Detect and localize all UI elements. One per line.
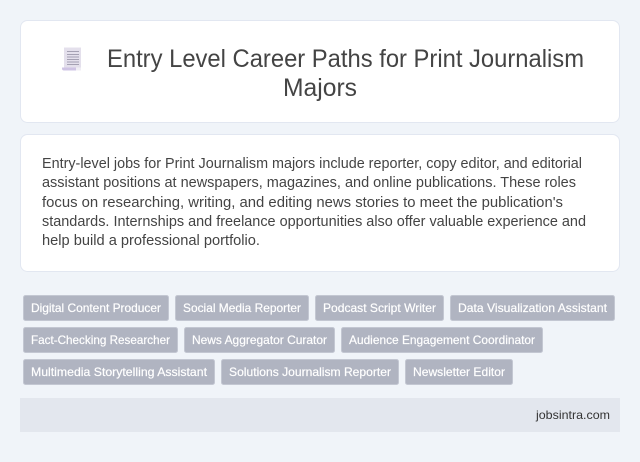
panel: title card bbox=[20, 20, 620, 122]
tag: Newsletter Editor: Newsletter Editor bbox=[413, 365, 505, 379]
tag: News Aggregator Curator bbox=[184, 328, 334, 352]
tag: News Aggregator Curator: News Aggregator Curator bbox=[192, 333, 327, 347]
panel: description bbox=[20, 134, 620, 272]
tag: Solutions Journalism Reporter bbox=[222, 360, 398, 384]
text block: description: focus on researching, writing, and editing news stories to meet the publication's bbox=[42, 195, 563, 211]
tag: Fact-Checking Researcher bbox=[24, 328, 178, 352]
tag: Social Media Reporter: Social Media Reporter bbox=[183, 301, 301, 315]
tag: Newsletter Editor bbox=[406, 360, 512, 384]
text block: description: Entry-level jobs for Print Journalism majors include reporter, copy editor, and editorial bbox=[42, 156, 582, 172]
title bbox=[107, 45, 584, 102]
tag: Audience Engagement Coordinator: Audience Engagement Coordinator bbox=[349, 333, 535, 347]
tag: Multimedia Storytelling Assistant bbox=[24, 360, 214, 384]
tag: Podcast Script Writer: Podcast Script Writer bbox=[323, 301, 436, 315]
footer source: jobsintra.com bbox=[535, 408, 610, 422]
text block: description bbox=[42, 156, 586, 249]
tag: Digital Content Producer bbox=[24, 296, 168, 320]
tag: Fact-Checking Researcher: Fact-Checking Researcher bbox=[31, 333, 170, 347]
text block: description: standards. Internships and freelance opportunities also offer valuable experience and bbox=[42, 214, 586, 230]
tags bbox=[24, 296, 614, 384]
icon: newspaper scroll bbox=[62, 48, 81, 70]
tag: Data Visualization Assistant: Data Visualization Assistant bbox=[458, 301, 608, 315]
footer bbox=[20, 398, 620, 432]
title: Majors bbox=[283, 74, 357, 102]
tag: Multimedia Storytelling Assistant: Multimedia Storytelling Assistant bbox=[31, 365, 208, 379]
tag: Solutions Journalism Reporter: Solutions Journalism Reporter bbox=[229, 365, 391, 379]
tag: Audience Engagement Coordinator bbox=[342, 328, 542, 352]
tag: Data Visualization Assistant bbox=[450, 296, 614, 320]
tag: Social Media Reporter bbox=[176, 296, 308, 320]
tag: Digital Content Producer: Digital Content Producer bbox=[31, 301, 161, 315]
text block: description: help build a professional portfolio. bbox=[42, 233, 260, 249]
tag: Podcast Script Writer bbox=[316, 296, 444, 320]
text block: description: assistant positions at newspapers, magazines, and online publications. These roles bbox=[42, 175, 576, 191]
title: Entry Level Career Paths for Print Journalism bbox=[107, 45, 584, 73]
